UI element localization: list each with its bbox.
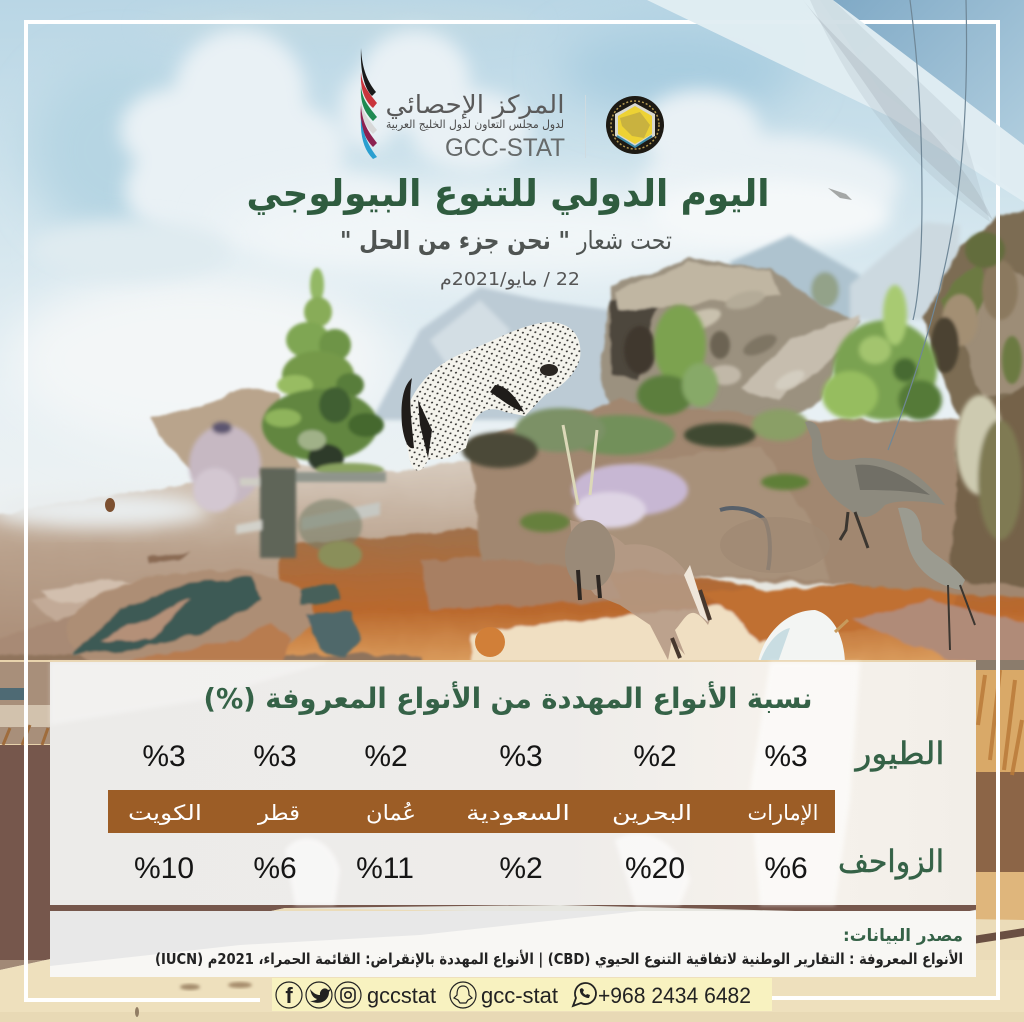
icon: twitter: [306, 982, 332, 1008]
panel: data sources: [50, 911, 976, 977]
sky with clouds: [0, 0, 1024, 540]
logo text: GCC-STAT name: GCC-STAT: [445, 134, 565, 162]
soft wash over lower scene: [0, 960, 1024, 1022]
distant mountains: [372, 222, 960, 420]
country header bar: الكويت: [128, 801, 202, 825]
row: bird percentages: %3: [764, 740, 808, 773]
shrubs and flowers: [189, 285, 1022, 540]
left green tree: [262, 268, 384, 477]
country header bar: قطر: [257, 801, 300, 825]
faint white oryx silhouettes: [50, 662, 860, 905]
handle: gcc-stat: gcc-stat: [481, 983, 558, 1008]
row: bird percentages: %3: [142, 740, 186, 773]
handle: gccstat: gccstat: [367, 983, 436, 1008]
rocks and hillside: [470, 205, 1024, 600]
sea turtle: [60, 559, 362, 685]
country header bar: الإمارات: [748, 801, 818, 825]
row: reptile percentages: %6: [764, 852, 808, 885]
row label: birds: الطيور: [853, 736, 944, 772]
logo text: GCC-STAT name: المركز الإحصائي: [386, 90, 564, 119]
country header bar: [108, 790, 835, 833]
icon: facebook: f: [285, 983, 293, 1008]
panel heading: نسبة الأنواع المهددة من الأنواع المعروفة (%): [204, 681, 812, 715]
country header bar: البحرين: [612, 801, 692, 825]
source heading: مصدر البيانات:: [843, 926, 963, 946]
country header bar: عُمان: [366, 801, 416, 825]
icon: whatsapp: [573, 983, 596, 1006]
logo text: GCC-STAT name: [386, 90, 565, 162]
row: reptile percentages: %6: [253, 852, 297, 885]
translucent diagonal ribbons top right: [647, 0, 1024, 450]
country header bar: السعودية: [466, 801, 570, 825]
row label: reptiles: الزواحف: [838, 844, 944, 880]
icon: facebook: [276, 982, 302, 1008]
date: 22 / مايو/2021م: [440, 269, 580, 290]
row: reptile percentages: %10: [134, 852, 194, 885]
row: reptile percentages: [134, 852, 808, 885]
subtitle: تحت شعار " نحن جزء من الحل ": [340, 226, 672, 256]
phone number: +968 2434 6482: [598, 983, 751, 1008]
logo text: GCC-STAT name: لدول مجلس التعاون لدول الخليج العربية: [386, 117, 564, 132]
main title: اليوم الدولي للتنوع البيولوجي: [246, 172, 770, 216]
panel: threatened species table: [50, 662, 976, 905]
icon: snapchat: [450, 982, 476, 1008]
row: bird percentages: %2: [364, 740, 408, 773]
row: bird percentages: %3: [499, 740, 543, 773]
row: reptile percentages: %2: [499, 852, 543, 885]
row: reptile percentages: %20: [625, 852, 685, 885]
row: bird percentages: %2: [633, 740, 677, 773]
row: bird percentages: [142, 740, 808, 773]
logo: GCC-STAT ribbon mark: [361, 48, 377, 159]
fence post: [236, 468, 386, 569]
oryx: [563, 425, 848, 665]
row: reptile percentages: %11: [356, 852, 414, 885]
logo area: [361, 48, 664, 162]
icon: instagram: [335, 982, 361, 1008]
row: bird percentages: %3: [253, 740, 297, 773]
orange disc: [475, 627, 505, 657]
orange earth centre: [0, 530, 1024, 679]
logo: GCC emblem: [606, 96, 664, 154]
houbara bustard birds: [720, 421, 975, 650]
leopard: [401, 322, 580, 471]
source text: الأنواع المعروفة : التقارير الوطنية لاتفاقية التنوع الحيوي (CBD) | الأنواع المهددة بالإنقراض: القائمة الحمراء، 2021م (IUCN): [155, 950, 963, 969]
footer: social media contacts: [272, 978, 772, 1011]
desert ground left: [0, 388, 500, 690]
rock mottling: [624, 232, 1022, 394]
lower area: sand, brown earth and golden streaks: [0, 660, 1024, 1022]
